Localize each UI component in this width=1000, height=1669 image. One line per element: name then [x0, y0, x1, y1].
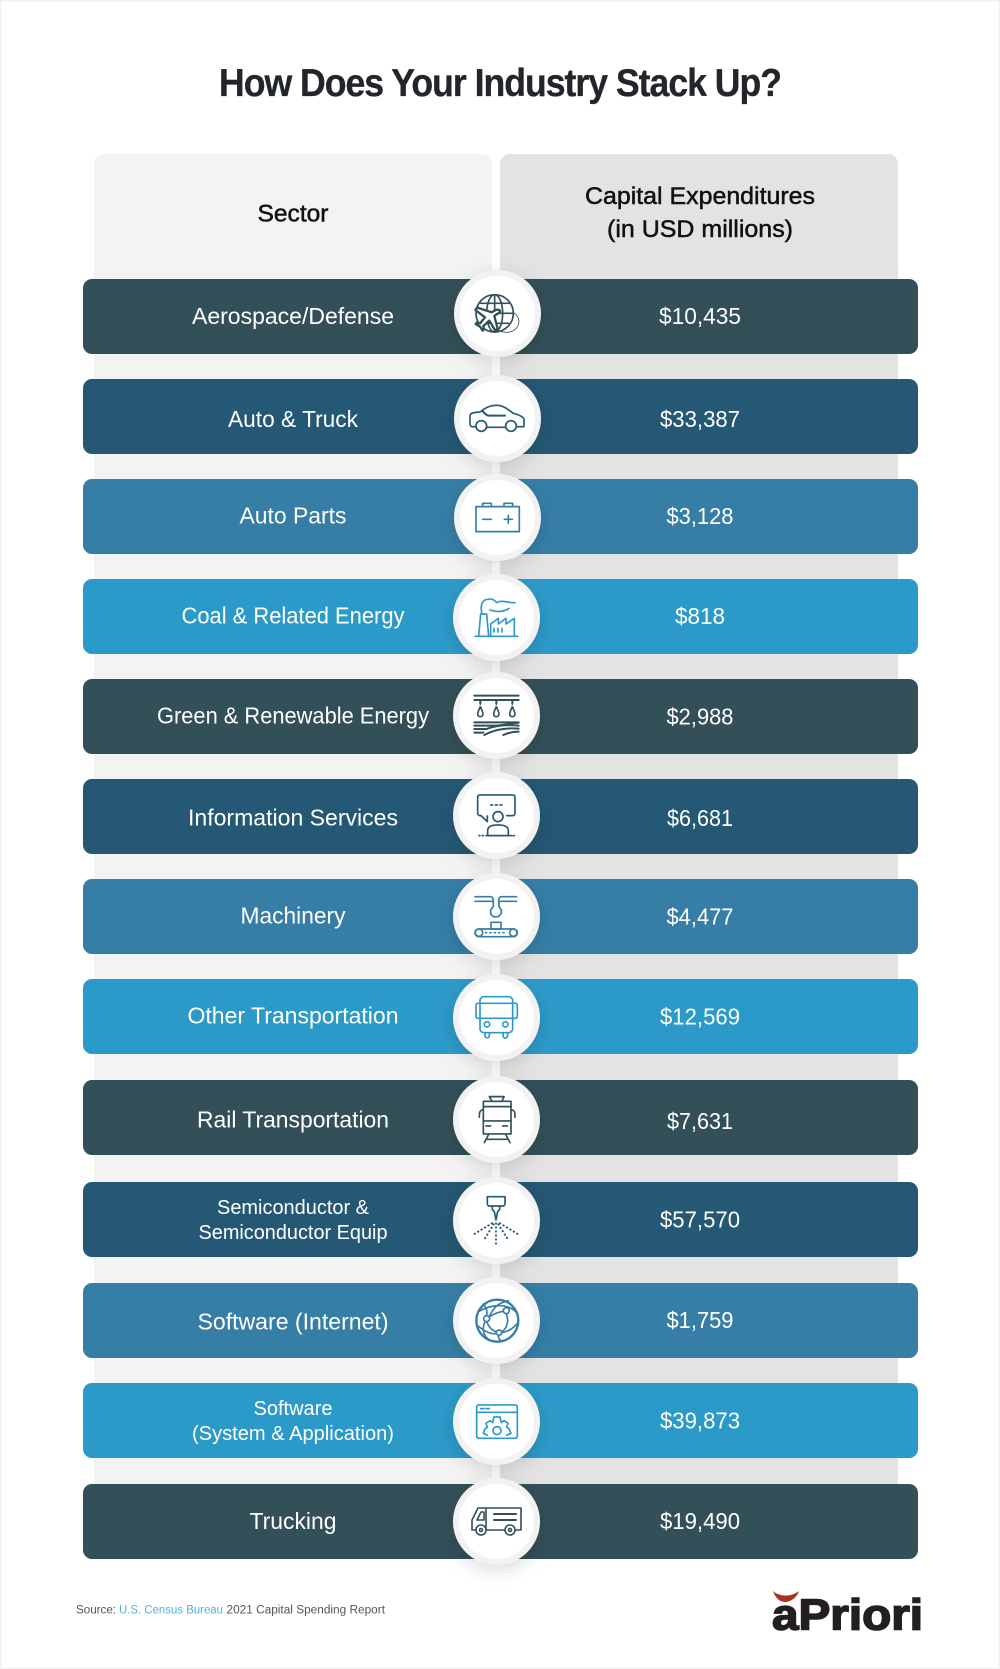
- panel: sector column: [94, 154, 492, 1534]
- logo: aPriori: aPriori: [772, 1590, 923, 1640]
- row: Green & Renewable Energy: [83, 672, 918, 759]
- row: Software (System & Application): $39,873: [660, 1408, 740, 1434]
- row: Software (System & Application): [83, 1378, 918, 1465]
- row: Coal & Related Energy: Coal & Related Energy: [182, 602, 405, 628]
- source note: [76, 1604, 386, 1616]
- icon: spray nozzle: [474, 1197, 518, 1244]
- icon: person with speech bubble: [478, 795, 515, 836]
- row: Software (System & Application): (System & Application): [192, 1423, 394, 1445]
- icon: globe and plane: [475, 295, 519, 332]
- row: Software (Internet): [83, 1277, 918, 1364]
- row: Other Transportation: [83, 974, 918, 1061]
- icon: delivery van: [472, 1508, 521, 1535]
- row: Software (Internet): $1,759: [666, 1307, 734, 1333]
- icon: tram: [479, 1097, 515, 1143]
- row: Software (Internet): Software (Internet): [198, 1308, 388, 1334]
- row: Semiconductor & Semiconductor Equip: Semiconductor &: [217, 1197, 370, 1219]
- icon: bus: [476, 997, 517, 1038]
- heading: capital expenditures: (in USD millions): [607, 216, 793, 243]
- row: Coal & Related Energy: $818: [675, 603, 725, 629]
- heading: capital expenditures: Capital Expenditures: [585, 183, 815, 210]
- row: Auto & Truck: Auto & Truck: [228, 406, 358, 432]
- row: Machinery: [83, 873, 918, 960]
- row: Green & Renewable Energy: Green & Renewable Energy: [157, 702, 429, 728]
- row: Information Services: [83, 772, 918, 859]
- icon: application window with gear: [477, 1405, 517, 1438]
- row: Coal & Related Energy: [83, 574, 918, 661]
- row: Auto Parts: Auto Parts: [240, 502, 346, 528]
- row: Machinery: $4,477: [666, 904, 734, 930]
- row: Software (System & Application): Software: [254, 1398, 332, 1420]
- source note: Source:: [76, 1604, 116, 1616]
- row: Other Transportation: $12,569: [660, 1004, 740, 1030]
- row: Rail Transportation: [83, 1076, 918, 1163]
- source note: U.S. Census Bureau: [119, 1604, 223, 1616]
- row: Auto Parts: [83, 474, 918, 561]
- row: Semiconductor & Semiconductor Equip: Semiconductor Equip: [198, 1222, 388, 1244]
- panel: capital expenditures column: [500, 154, 898, 1534]
- row: Other Transportation: Other Transportation: [188, 1002, 398, 1028]
- row: Auto & Truck: [83, 375, 918, 462]
- row: Trucking: Trucking: [250, 1508, 336, 1534]
- row: Semiconductor & Semiconductor Equip: [83, 1177, 918, 1264]
- row: Aerospace/Defense: $10,435: [659, 303, 741, 329]
- row: Trucking: [83, 1478, 918, 1565]
- icon: conveyor machine: [475, 897, 517, 937]
- row: Information Services: Information Services: [188, 804, 398, 830]
- icon: network globe: [476, 1300, 518, 1342]
- row: Information Services: $6,681: [667, 805, 733, 831]
- row: Green & Renewable Energy: $2,988: [666, 704, 734, 730]
- row: Auto & Truck: $33,387: [660, 406, 740, 432]
- row: Trucking: $19,490: [660, 1508, 740, 1534]
- row: Machinery: Machinery: [240, 902, 346, 928]
- title: How Does Your Industry Stack Up?: [219, 62, 781, 105]
- icon: irrigated field: [474, 696, 519, 735]
- row: Aerospace/Defense: Aerospace/Defense: [192, 303, 394, 329]
- row: Auto Parts: $3,128: [666, 503, 734, 529]
- row: Rail Transportation: Rail Transportation: [197, 1106, 389, 1132]
- icon: factory: [475, 599, 518, 636]
- row: Aerospace/Defense: [83, 270, 918, 357]
- source note: 2021 Capital Spending Report: [226, 1604, 386, 1616]
- row: Semiconductor & Semiconductor Equip: $57,570: [660, 1206, 740, 1232]
- heading: capital expenditures: [585, 183, 815, 243]
- heading: sector: Sector: [258, 200, 328, 228]
- icon: battery: [476, 503, 519, 532]
- icon: car: [470, 405, 524, 431]
- row: Rail Transportation: $7,631: [667, 1108, 733, 1134]
